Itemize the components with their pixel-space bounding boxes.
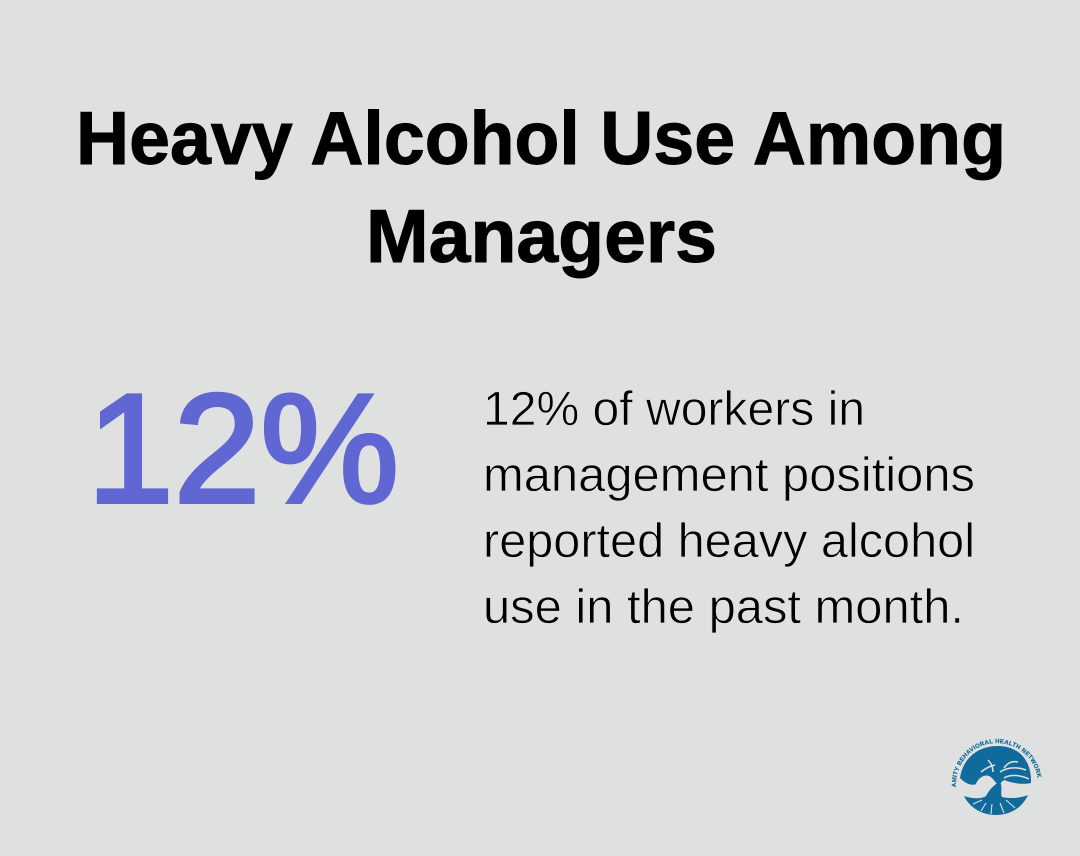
description text: use in the past month. (483, 581, 964, 634)
logo arc text: AMITY BEHAVIORAL HEALTH NETWORK (952, 738, 1042, 788)
icon: Amity Behavioral Health Network logo (952, 738, 1042, 815)
big statistic: 12%: 12% (87, 362, 399, 535)
title: Heavy Alcohol Use Among (76, 96, 1006, 180)
title (76, 96, 1006, 278)
description text: reported heavy alcohol (483, 515, 975, 568)
title: Managers (366, 194, 717, 278)
description text (483, 383, 975, 634)
logo branches (981, 760, 1029, 779)
description text: management positions (483, 449, 975, 502)
logo trunk and ground (964, 781, 1028, 815)
description text: 12% of workers in (483, 383, 865, 436)
logo roots (973, 800, 1015, 814)
logo tree canopy (960, 746, 1031, 785)
